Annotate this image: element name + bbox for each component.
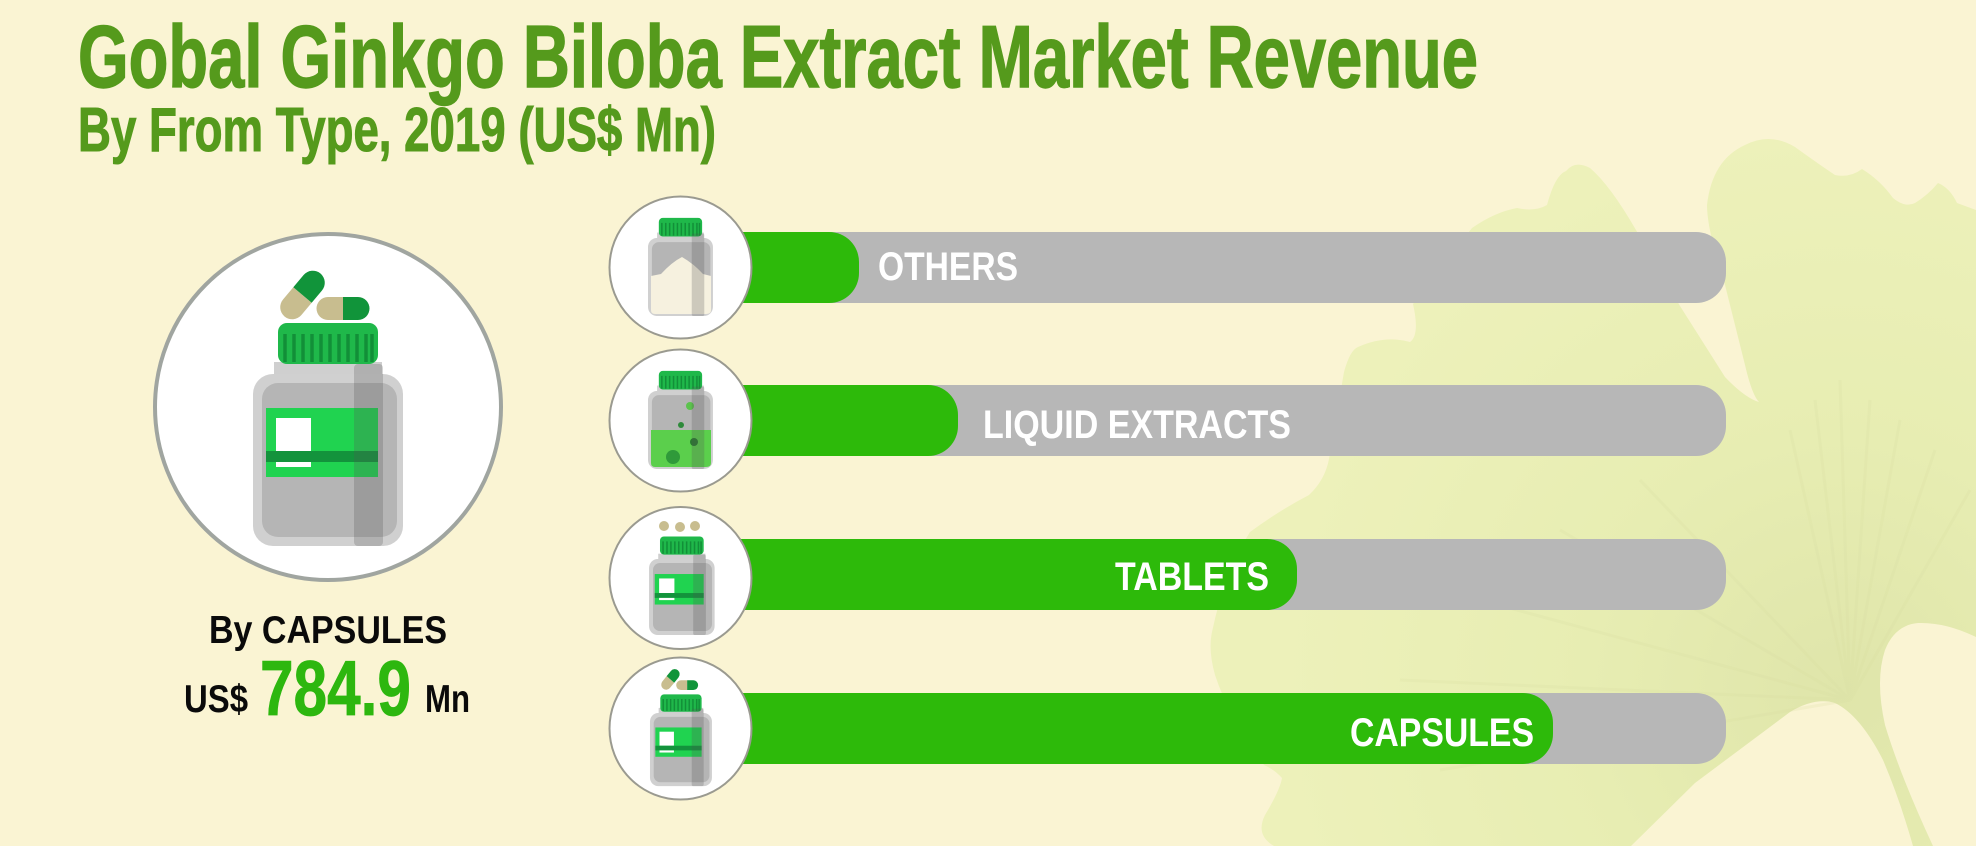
- title: Gobal Ginkgo Biloba Extract Market Revenue: [78, 7, 1478, 106]
- currency label: US$: [184, 678, 248, 721]
- bar: tablets: [700, 539, 1726, 610]
- bar: others: [700, 232, 1726, 303]
- bar: tablets: TABLETS: [1115, 555, 1269, 599]
- icon: tablets bottle: [610, 507, 752, 649]
- icon: capsules bottle: [610, 658, 752, 800]
- subtitle: By From Type, 2019 (US$ Mn): [78, 96, 716, 165]
- bar: liquid extracts: [700, 385, 1726, 456]
- icon: powder bottle: [610, 196, 752, 338]
- bar: capsules: [700, 693, 1726, 764]
- callout heading: By CAPSULES: [209, 609, 447, 652]
- bar: others: OTHERS: [878, 245, 1018, 289]
- unit label: Mn: [425, 678, 470, 721]
- callout: capsules value: [184, 609, 470, 732]
- bar: capsules: CAPSULES: [1350, 711, 1534, 755]
- ginkgo leaf watermark: [1211, 139, 1976, 846]
- panel: highlighted capsules icon: [155, 234, 501, 580]
- bar: liquid extracts: LIQUID EXTRACTS: [983, 403, 1291, 447]
- capsules value number: 784.9: [260, 644, 411, 732]
- icon: liquid bottle: [610, 350, 752, 492]
